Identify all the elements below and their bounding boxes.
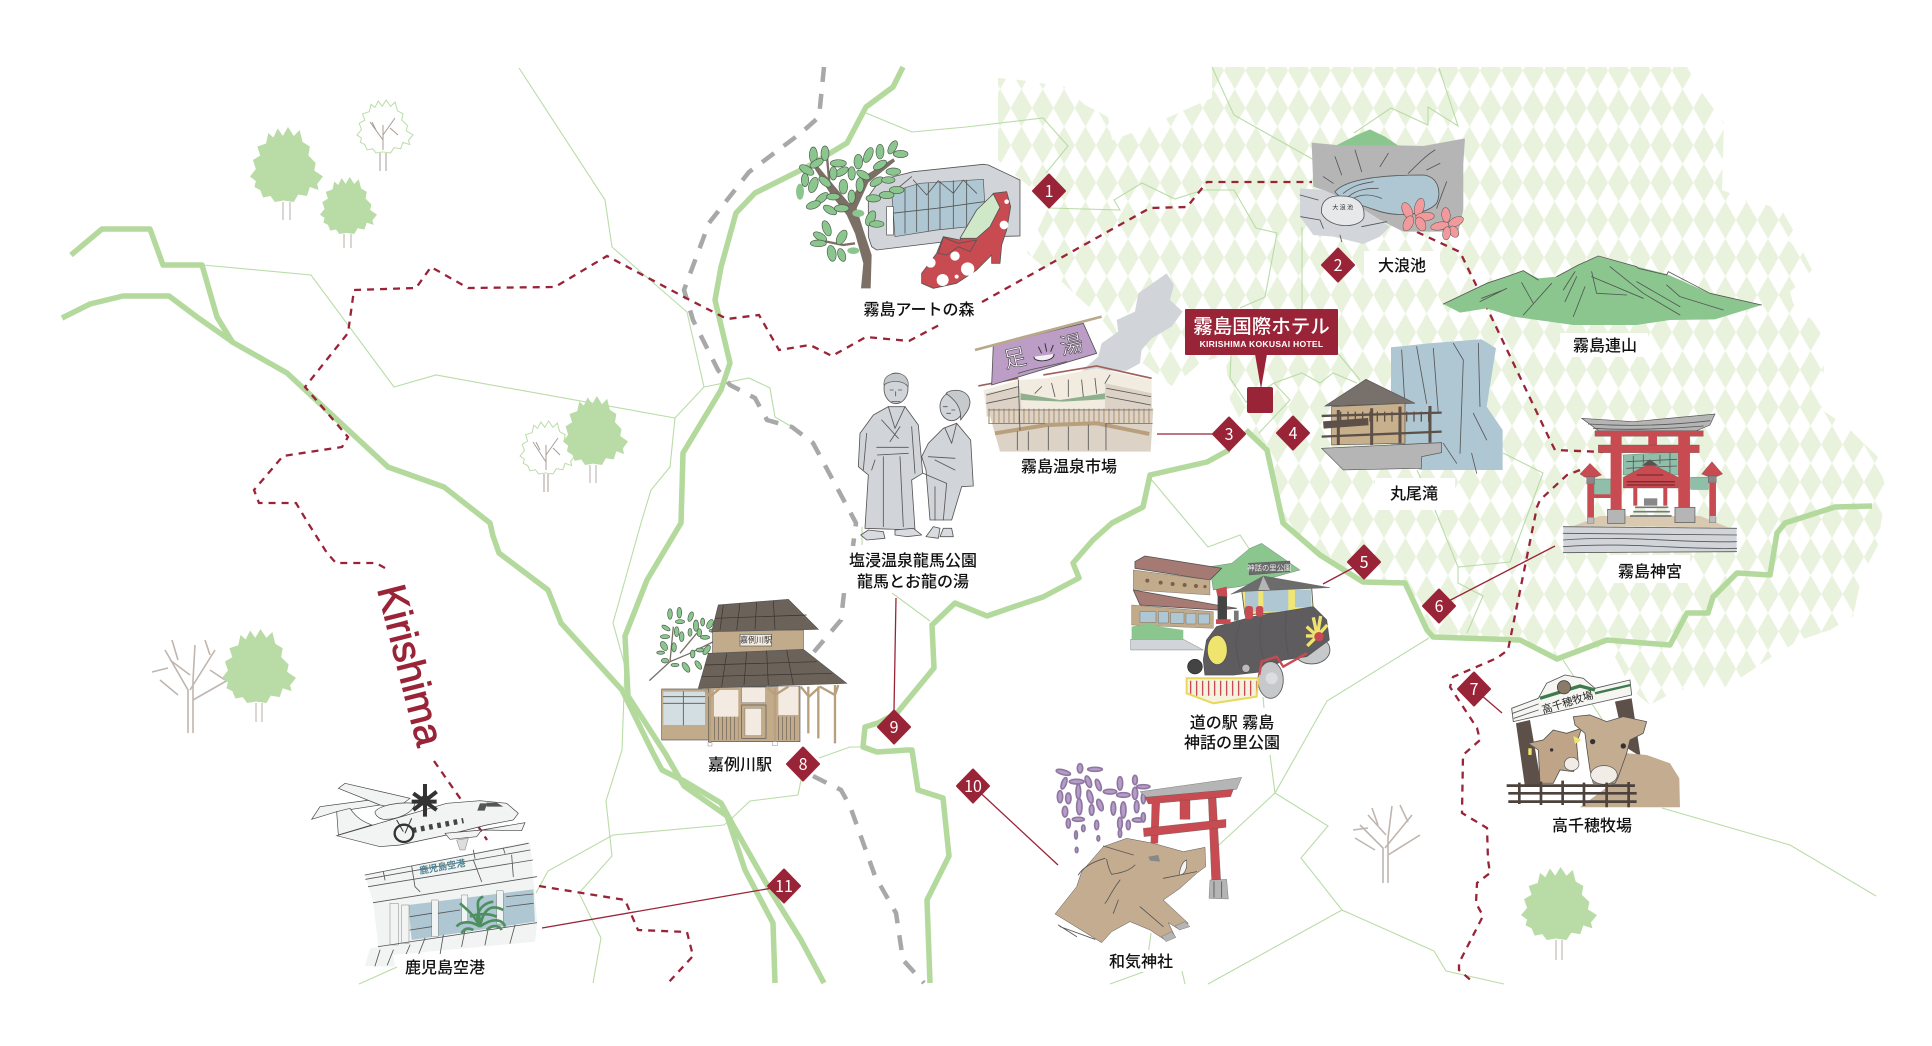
- patterned highland area: [998, 67, 1886, 705]
- locomotive body: [1188, 587, 1329, 675]
- marker 11: 11: [775, 873, 793, 897]
- mountains: [1210, 543, 1300, 590]
- ranch arch sign: [1512, 675, 1632, 722]
- label: roadside station: [1180, 710, 1284, 754]
- hotel pointer: [1255, 354, 1267, 389]
- palm plant: [457, 897, 505, 933]
- illustration: roadside station steam train: [1131, 543, 1330, 703]
- pink flowers: [1399, 197, 1465, 241]
- hut wall: [1332, 403, 1405, 445]
- label: Kirishima art forest: [860, 297, 978, 321]
- large cow: [1550, 715, 1680, 807]
- label: Shiobitashi Ryoma park: 塩浸温泉龍馬公園: [849, 552, 977, 570]
- marker 1: 1: [1045, 178, 1053, 202]
- label: Kagoshima airport: [398, 954, 492, 980]
- illustration: Kagoshima airport: [312, 783, 537, 967]
- illustration: Ryoma and Oryo statues: [858, 373, 973, 540]
- tree with leaves: [796, 139, 908, 288]
- label: Wake shrine: 和気神社: [1109, 953, 1173, 971]
- marker 6: 6: [1435, 593, 1444, 617]
- label: roadside station: 神話の里公園: [1184, 734, 1280, 752]
- label: Kirishima shrine: 霧島神宮: [1618, 563, 1682, 581]
- numbered markers: [768, 174, 1490, 902]
- marker 2: [1322, 248, 1354, 282]
- prefectural dashed border: [254, 182, 1603, 983]
- label: Kirishima mountains: 霧島連山: [1573, 337, 1637, 355]
- marker 8: 8: [799, 751, 808, 775]
- noren banner: 足: [1000, 338, 1029, 375]
- front wheel and trim: [1258, 653, 1307, 698]
- illustration: Kirishima shrine: [1563, 414, 1737, 553]
- rear wheel: [1293, 636, 1330, 664]
- boar: [1055, 838, 1206, 943]
- red shoe: [922, 192, 1011, 288]
- label: Onami pond: 大浪池: [1378, 257, 1426, 275]
- hut roof: [1325, 379, 1415, 406]
- label: Takachiho ranch: [1548, 813, 1636, 837]
- stone lanterns: [1580, 462, 1723, 523]
- label: roadside station: 道の駅 霧島: [1190, 714, 1274, 732]
- illustration: Takachiho ranch: [1507, 675, 1680, 807]
- marker 7: 7: [1470, 676, 1479, 700]
- cowcatcher: [1187, 678, 1258, 703]
- marker 7: [1458, 672, 1490, 706]
- platform: [1322, 443, 1442, 470]
- marker 9: [878, 710, 910, 744]
- bare and leafy tree left: [152, 629, 296, 733]
- waterfall: [1391, 339, 1503, 470]
- tree branch: [649, 607, 723, 681]
- Ryoma: [858, 373, 923, 540]
- sign board: 神話の里公園: [1247, 563, 1291, 574]
- tree cluster top left: [250, 100, 413, 248]
- hotel sign: [1185, 309, 1338, 355]
- marker 10: [957, 770, 989, 802]
- marker 2: 2: [1334, 252, 1343, 276]
- illustration: Kareigawa station: [649, 599, 847, 746]
- marker 4: 4: [1289, 420, 1298, 444]
- station body: [703, 685, 838, 746]
- thin boundary lines: [203, 67, 1876, 984]
- connector lines: [542, 434, 1555, 928]
- hill: [1335, 129, 1400, 147]
- noren banner: [975, 317, 1102, 385]
- cab: [1231, 576, 1330, 615]
- place labels: [398, 251, 1690, 980]
- terminal building: [365, 842, 537, 967]
- marker 8: [787, 748, 819, 780]
- region title: Kirishima: Kirishima: [368, 580, 452, 751]
- label: Kirishima mountains: [1560, 333, 1648, 357]
- label: Wake shrine: [1103, 950, 1179, 972]
- label: Maruo falls: 丸尾滝: [1390, 485, 1438, 503]
- hotel square: [1247, 387, 1273, 413]
- trees: [152, 100, 1597, 960]
- tree pair centre: [520, 396, 628, 492]
- Oryo: [922, 390, 973, 538]
- illustration: Onami pond: [1300, 129, 1465, 244]
- label: Maruo falls: [1375, 478, 1455, 510]
- illustration: Kirishima onsen market: [975, 273, 1183, 452]
- marker 5: 5: [1360, 549, 1369, 573]
- label: Kareigawa station: [700, 752, 784, 776]
- rock wall: [1312, 138, 1465, 232]
- airplane: [312, 783, 525, 850]
- side annex: [662, 689, 708, 740]
- bare tree right: [1353, 805, 1420, 883]
- label: Kirishima art forest: 霧島アートの森: [863, 301, 975, 319]
- upper roof: [712, 599, 818, 632]
- hotel name in English: KIRISHIMA KOKUSAI HOTEL: [1200, 339, 1323, 349]
- hotel marker: [1185, 309, 1338, 413]
- stone base: [1563, 516, 1737, 553]
- upper floor wall: 嘉例川駅: [740, 635, 772, 646]
- label: Shiobitashi Ryoma park: [832, 547, 994, 593]
- lower roof: [698, 649, 847, 688]
- leafy tree bottom right: [1521, 867, 1597, 960]
- label: Takachiho ranch: 高千穂牧場: [1552, 817, 1632, 835]
- terminal building: 鹿児島空港: [418, 855, 467, 877]
- illustration: Wake shrine boar: [1055, 764, 1242, 943]
- label: Kirishima onsen market: [1015, 454, 1123, 478]
- sunburst: [1306, 616, 1327, 646]
- wisteria: [1056, 764, 1150, 853]
- hotel name: 霧島国際ホテル: [1193, 316, 1330, 338]
- marker 11: [768, 870, 800, 902]
- upper floor wall: [713, 630, 803, 654]
- stone sign: [1321, 196, 1364, 226]
- large torii: [1582, 414, 1715, 523]
- noren banner: 湯: [1056, 325, 1086, 362]
- illustration: art forest: [796, 139, 1020, 288]
- small cow: [1528, 728, 1582, 783]
- illustration: Maruo waterfall: [1322, 339, 1503, 473]
- marker 1: [1033, 174, 1065, 208]
- marker 10: 10: [964, 773, 982, 797]
- railing: [1338, 406, 1430, 445]
- label: Onami pond: [1364, 251, 1440, 279]
- marker 3: 3: [1225, 421, 1233, 445]
- smoke: [1082, 273, 1183, 371]
- label: Kirishima onsen market: 霧島温泉市場: [1021, 458, 1117, 476]
- pond water: [1335, 175, 1439, 214]
- railway dashed line: [684, 67, 924, 983]
- marker 4: [1277, 416, 1309, 450]
- label: Shiobitashi Ryoma park: 龍馬とお龍の湯: [857, 573, 969, 591]
- stone sign: 大 浪 池: [1332, 202, 1353, 211]
- main hall: [1594, 452, 1708, 516]
- roadside building: [1131, 556, 1237, 650]
- marker 6: [1423, 590, 1455, 622]
- building: [978, 366, 1153, 452]
- label: Kirishima shrine: [1608, 555, 1690, 583]
- posts: [1516, 698, 1641, 787]
- pale stones: [1300, 188, 1390, 244]
- marker 5: [1348, 546, 1380, 578]
- ranch arch sign: 高千穂牧場: [1540, 687, 1596, 717]
- illustration: Kirishima mountains: [1443, 256, 1762, 325]
- small torii: [1140, 777, 1242, 899]
- marker 9: 9: [890, 714, 899, 738]
- museum building: [868, 164, 1020, 250]
- marker 3: [1213, 418, 1245, 450]
- label: Kagoshima airport: 鹿児島空港: [405, 959, 485, 977]
- label: Kareigawa station: 嘉例川駅: [708, 756, 772, 774]
- wood fence: [1507, 781, 1637, 807]
